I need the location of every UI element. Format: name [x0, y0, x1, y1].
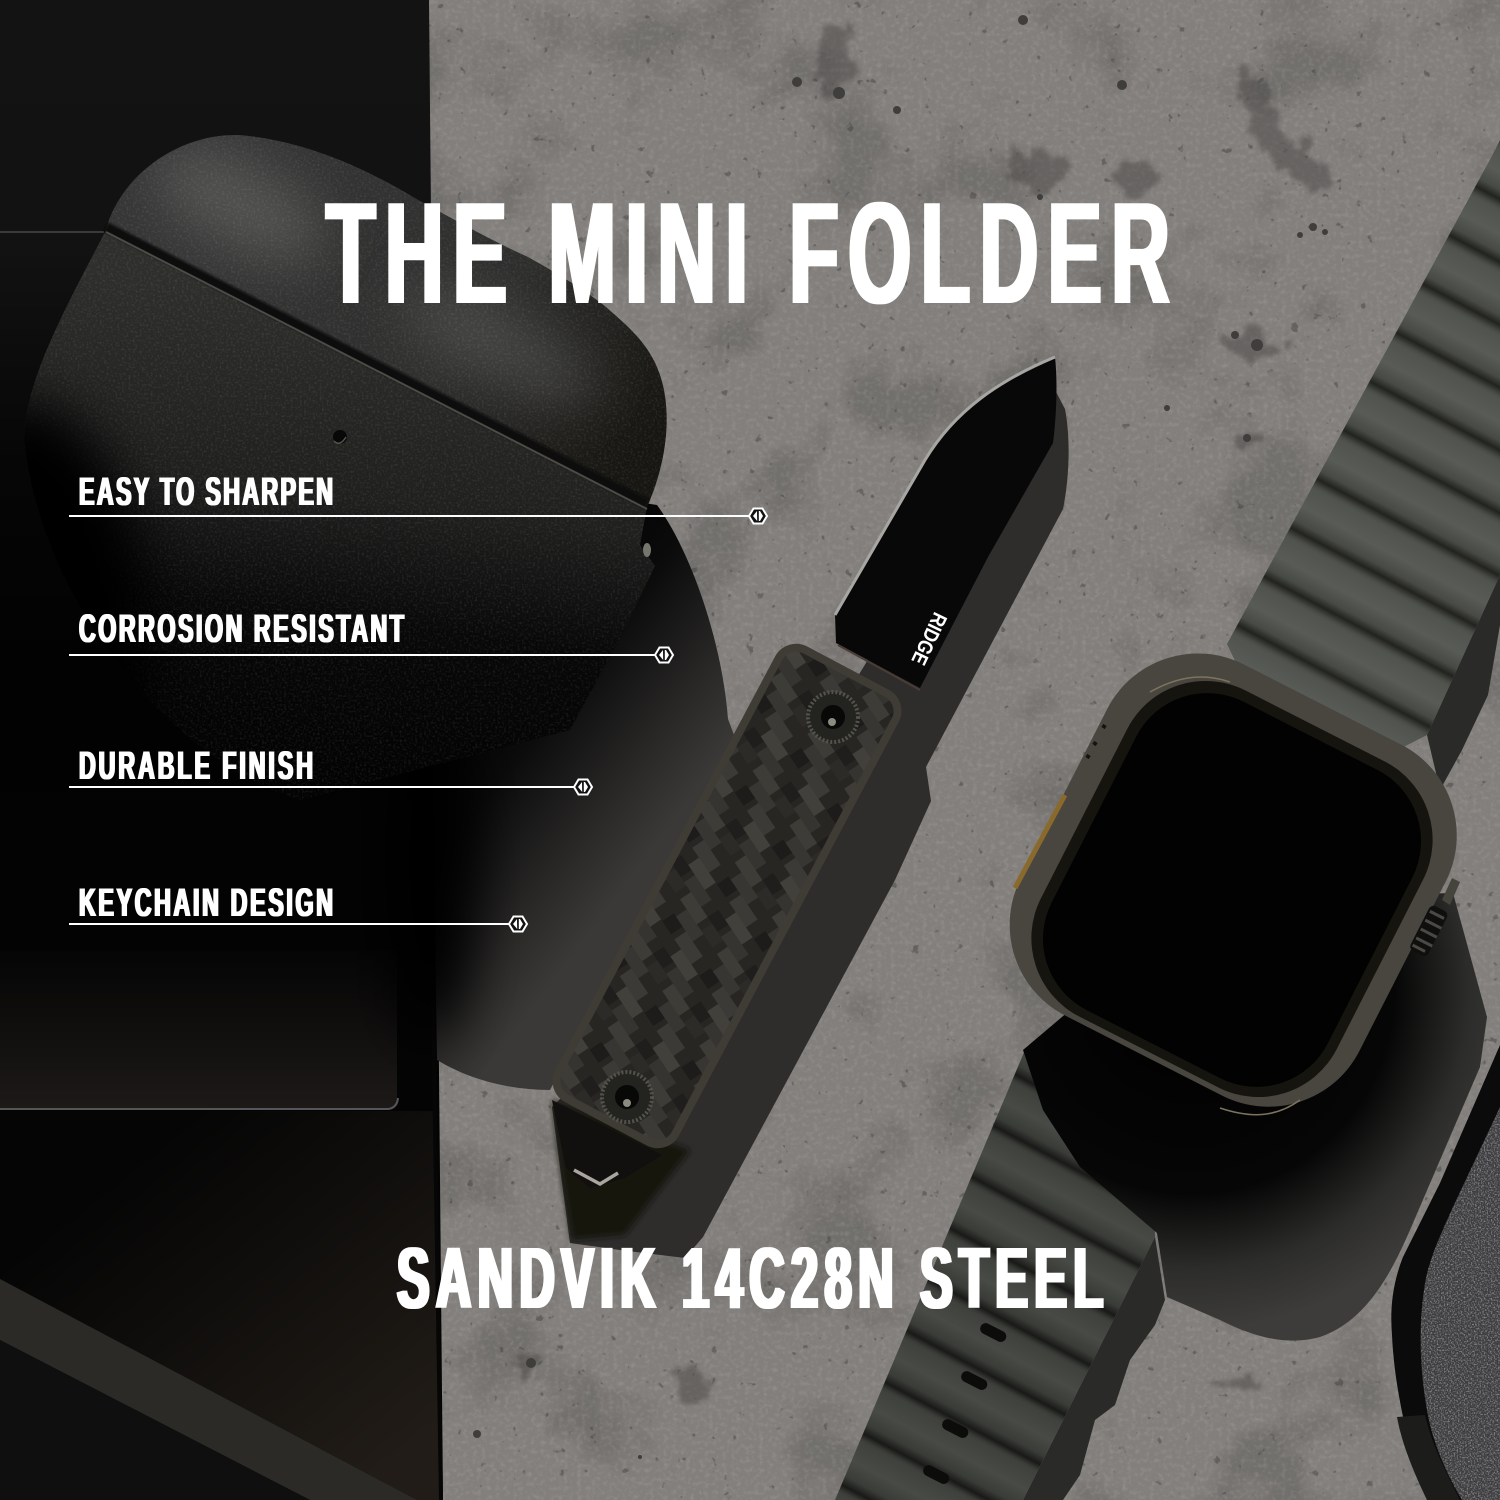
leader line: [69, 515, 750, 517]
earbud case: [27, 135, 667, 800]
bezel highlights: [1150, 677, 1300, 1115]
strap slots: [921, 1321, 1008, 1486]
strap shadow strips: [1023, 575, 1500, 1500]
lanyard tip: [552, 1100, 662, 1188]
label: CORROSION RESISTANT: [79, 605, 404, 651]
side button: [1442, 878, 1460, 905]
watch strap upper: [1227, 140, 1500, 800]
icon: hex marker: [749, 508, 767, 524]
label: DURABLE FINISH: [79, 742, 313, 788]
digital crown: [1409, 904, 1449, 958]
watch screen: [1015, 665, 1449, 1115]
lower wedge: [0, 1111, 441, 1500]
hinge seam: [106, 227, 647, 504]
leader line: [69, 786, 575, 788]
knife shadow: [552, 390, 1069, 1258]
leader line: [69, 654, 655, 656]
callout: corrosion resistant: [69, 605, 673, 662]
dark desk panel: [0, 0, 443, 1500]
case lid: [106, 135, 667, 507]
smart watch: [974, 618, 1492, 1142]
watch case: [974, 618, 1492, 1142]
callout: easy to sharpen: [69, 468, 767, 524]
watch bezel: [1001, 651, 1463, 1127]
case pinhole: [333, 430, 347, 444]
carbon handle: [549, 641, 905, 1151]
concrete stains: [473, 15, 1328, 1459]
subtitle: SANDVIK 14C28N STEEL: [397, 1229, 1103, 1327]
watch strap lower: [835, 1050, 1155, 1500]
case shadow: [385, 470, 734, 1090]
icon: hex marker: [509, 916, 527, 932]
lower screw: [602, 1072, 652, 1122]
upper screw: [808, 692, 858, 742]
callout: keychain design: [69, 879, 527, 932]
diagonal band: [0, 1279, 417, 1500]
case body: [24, 230, 655, 800]
hinge pin: [643, 543, 651, 557]
callout: durable finish: [69, 742, 592, 794]
brand mark: RIDGE: [906, 609, 951, 668]
blade spine highlight: [835, 357, 1055, 615]
title: THE MINI FOLDER: [326, 172, 1170, 334]
lanyard highlight: [574, 1170, 618, 1184]
label: EASY TO SHARPEN: [79, 468, 333, 514]
speaker holes: [1087, 725, 1105, 758]
lower tray: [0, 950, 397, 1108]
knife blade: [835, 357, 1056, 688]
leader line: [69, 923, 510, 925]
lid highlights: [24, 135, 666, 800]
orange accent: [1015, 795, 1065, 888]
fabric object: [1391, 1045, 1500, 1500]
icon: hex marker: [655, 648, 673, 662]
blade base edge: [838, 645, 920, 690]
label: KEYCHAIN DESIGN: [79, 879, 333, 925]
pocket knife: [549, 357, 1056, 1188]
watch shadow: [1023, 893, 1487, 1341]
icon: hex marker: [574, 780, 592, 794]
